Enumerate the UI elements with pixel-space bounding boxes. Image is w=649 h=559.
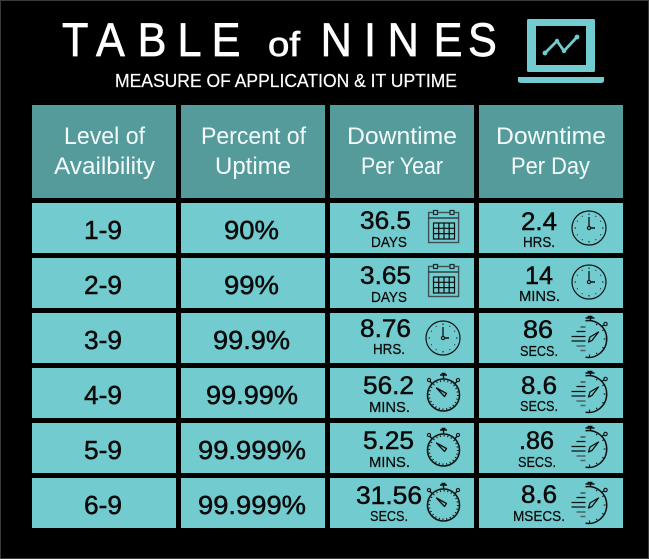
row 5-9: .86: [519, 427, 554, 455]
header: level of availability: [32, 105, 176, 198]
row 4-9: 8.6: [521, 372, 557, 400]
row 3-9: SECS.: [520, 343, 558, 360]
row 6-9: 8.6: [521, 481, 557, 509]
row 4-9: 4-9: [84, 380, 122, 410]
row 3-9: [32, 313, 623, 363]
row 1-9: DAYS: [371, 234, 407, 251]
row 5-9: 99.999%: [198, 435, 306, 465]
header: level of availability: Availbility: [54, 153, 155, 180]
row 1-9: 1-9: [84, 215, 122, 245]
row 5-9: MINS.: [369, 454, 410, 471]
row 1-9: 36.5: [360, 207, 411, 235]
header: downtime per year: Downtime: [347, 123, 457, 150]
row 6-9: [32, 478, 623, 528]
header: downtime per day: Downtime: [496, 123, 606, 150]
row 6-9: MSECS.: [513, 508, 565, 525]
header: downtime per day: Per Day: [511, 153, 590, 180]
row 3-9: 8.76: [360, 315, 411, 343]
row 1-9: HRS.: [523, 234, 555, 251]
title: NINES: [321, 13, 497, 66]
row 6-9: 99.999%: [198, 490, 306, 520]
row 4-9: [32, 368, 623, 418]
row 6-9: SECS.: [370, 508, 408, 525]
row 4-9: MINS.: [369, 399, 410, 416]
row 6-9: 31.56: [356, 482, 422, 510]
header row: [32, 105, 623, 198]
row 4-9: 56.2: [363, 372, 414, 400]
title: TABLE: [62, 13, 240, 66]
row 4-9: SECS.: [520, 398, 558, 415]
header: percent of uptime: Percent of: [201, 123, 306, 150]
row 3-9: 86: [523, 316, 553, 344]
row 5-9: SECS.: [518, 454, 556, 471]
header: downtime per day: [479, 105, 623, 198]
row 1-9: 90%: [224, 215, 279, 245]
header: downtime per year: [330, 105, 474, 198]
row 2-9: MINS.: [519, 288, 560, 305]
header: downtime per year: Per Year: [361, 153, 443, 180]
row 4-9: 99.99%: [206, 380, 298, 410]
row 3-9: HRS.: [373, 341, 405, 358]
row 1-9: 2.4: [521, 208, 557, 236]
row 2-9: [32, 258, 623, 308]
row 2-9: 2-9: [84, 270, 122, 300]
row 5-9: [32, 423, 623, 473]
row 5-9: 5-9: [84, 435, 122, 465]
row 5-9: 5.25: [363, 427, 414, 455]
row 2-9: 99%: [224, 270, 279, 300]
row 2-9: 14: [525, 262, 553, 290]
header: percent of uptime: [181, 105, 325, 198]
icon: laptop with line chart: [518, 19, 604, 83]
subtitle: MEASURE OF APPLICATION & IT UPTIME: [115, 70, 457, 91]
title: of: [268, 26, 301, 64]
row 1-9: [32, 203, 623, 253]
row 2-9: 3.65: [360, 262, 411, 290]
row 2-9: DAYS: [371, 289, 407, 306]
title: [62, 13, 497, 66]
row 3-9: 99.9%: [213, 325, 290, 355]
row 3-9: 3-9: [84, 325, 122, 355]
header: level of availability: Level of: [64, 123, 145, 150]
header: percent of uptime: Uptime: [215, 153, 291, 180]
row 6-9: 6-9: [84, 490, 122, 520]
